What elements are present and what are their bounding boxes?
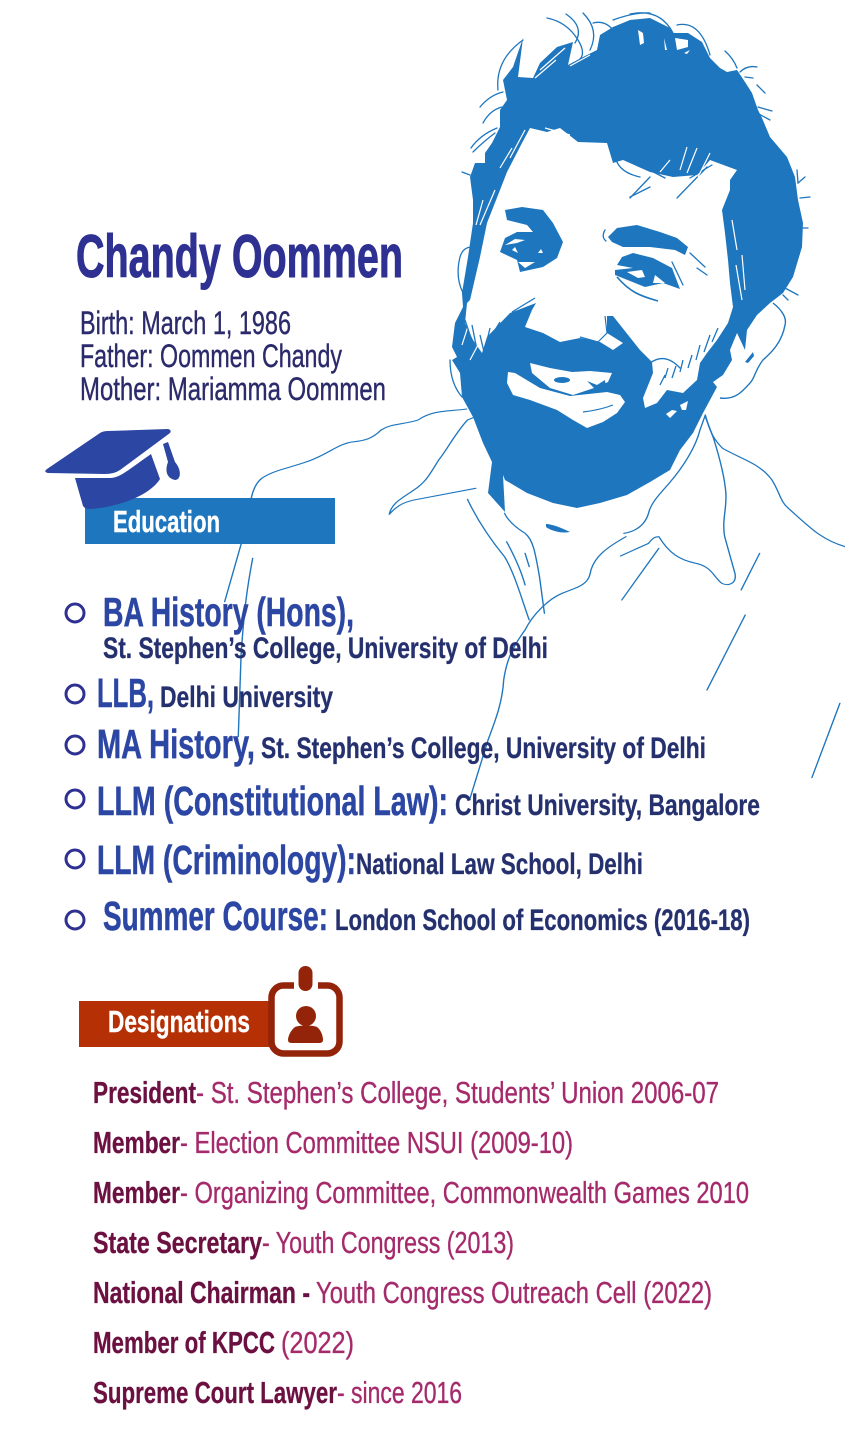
list item: MA History: St. Stephen’s College, University of Delhi: [261, 732, 706, 765]
list item: LLM Constitutional Law: Christ University, Bangalore: [455, 789, 760, 822]
hair highlights: [638, 30, 690, 54]
icon: right brow: [608, 225, 688, 255]
designation: State Secretary: State Secretary: [93, 1225, 263, 1260]
icon: face highlight: [465, 128, 737, 408]
list item: LLM Criminology: National Law School, Delhi: [356, 848, 643, 881]
designation: President: President: [93, 1075, 196, 1110]
list item: LLM Criminology: LLM (Criminology):: [97, 837, 356, 883]
icon: id badge: [272, 966, 340, 1054]
list item: BA History: St. Stephen’s College, University of Delhi: [103, 632, 548, 665]
illustration: shirt outline: [225, 409, 845, 800]
designation: Member of KPCC: Member of KPCC: [93, 1325, 275, 1360]
personal details: Mother: Mariamma Oommen: [80, 371, 386, 407]
designations list: [93, 1075, 749, 1410]
hair streaks: [462, 48, 745, 360]
list item: LLB: Delhi University: [160, 681, 333, 714]
designation: National Chairman: [93, 1275, 712, 1310]
list item: MA History: [66, 721, 706, 767]
designation: State Secretary: - Youth Congress (2013): [262, 1225, 514, 1260]
icon: ear: [720, 303, 785, 398]
designation: Supreme Court Lawyer: Supreme Court Lawyer: [93, 1375, 337, 1410]
title: Chandy Oommen: [76, 223, 403, 290]
beard flecks: [666, 401, 688, 418]
designation: Member of KPCC: (2022): [281, 1325, 354, 1360]
icon: hair and beard silhouette: [452, 18, 803, 512]
list item: LLB: [66, 670, 333, 716]
designation: President: [93, 1075, 719, 1110]
icon: left eye and brow: [500, 207, 563, 272]
heading: designations: [79, 1001, 271, 1047]
list item: LLM Constitutional Law: LLM (Constitutional Law):: [97, 778, 448, 824]
icon: right eye: [615, 253, 680, 301]
icon: graduation cap: [45, 429, 180, 509]
designation: National Chairman: National Chairman -: [93, 1275, 310, 1310]
designation: Member election committee: [93, 1125, 573, 1160]
designation: Supreme Court Lawyer: - since 2016: [337, 1375, 462, 1410]
heading: education: [85, 498, 335, 544]
designation: Member organizing committee: Member: [93, 1175, 180, 1210]
illustration: portrait head: [450, 13, 810, 533]
personal details: Father: Oommen Chandy: [80, 338, 342, 374]
list item: LLB: LLB,: [97, 670, 154, 716]
list item: Summer Course: Summer Course:: [103, 893, 328, 939]
list item: LLM Criminology: [66, 837, 643, 883]
icon: hair wisps: [450, 13, 810, 397]
designation: National Chairman: Youth Congress Outreach Cell (2022): [316, 1275, 712, 1310]
designation: State Secretary: [93, 1225, 514, 1260]
heading: designations: Designations: [108, 1004, 250, 1039]
icon: nose line: [580, 316, 607, 342]
icon: cheek stubble: [465, 298, 718, 385]
list item: Summer Course: [66, 893, 750, 939]
icon: collar mark: [546, 524, 570, 533]
personal details: [80, 305, 386, 407]
icon: mouth: [507, 363, 625, 428]
education list: [66, 589, 760, 939]
personal details: Birth: March 1, 1986: [80, 305, 291, 341]
heading: education: Education: [113, 504, 220, 539]
designation: Member election committee: Member: [93, 1125, 180, 1160]
list item: MA History: MA History,: [97, 721, 255, 767]
designation: Member election committee: - Election Committee NSUI (2009-10): [180, 1125, 573, 1160]
list item: BA History: BA History (Hons),: [103, 589, 354, 635]
list item: BA History: [66, 589, 548, 665]
